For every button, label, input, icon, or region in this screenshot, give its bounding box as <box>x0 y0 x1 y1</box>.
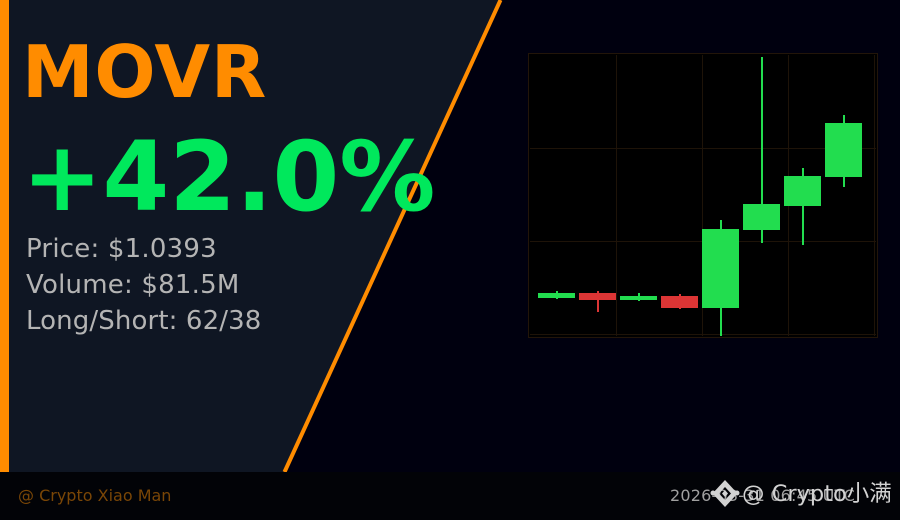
candle 3 <box>620 293 657 301</box>
diagonal orange line <box>284 0 500 472</box>
candle 4 <box>661 294 698 309</box>
text block: market stats <box>26 234 261 336</box>
panel: left diagonal background <box>0 0 500 472</box>
watermark text: @ Crypto小满 <box>742 481 892 507</box>
candle 5 <box>702 220 739 336</box>
icon: watermark logo <box>710 480 740 507</box>
candlestick chart <box>528 54 878 338</box>
candle 1 <box>538 291 575 299</box>
footer credit: @ Crypto Xiao Man <box>18 486 171 505</box>
left accent bar <box>0 0 9 472</box>
candle 2 <box>579 291 616 312</box>
percent change: +42.0% <box>22 121 435 233</box>
text block: market stats: Long/Short: 62/38 <box>26 306 261 336</box>
candle 8 <box>825 115 862 187</box>
text block: market stats: Volume: $81.5M <box>26 270 240 300</box>
candle 6 <box>743 57 780 243</box>
title: ticker: MOVR <box>22 30 267 114</box>
candle 7 <box>784 168 821 245</box>
footer timestamp: 2026-03-31 06:45 UTC <box>670 486 855 505</box>
text block: market stats: Price: $1.0393 <box>26 234 217 264</box>
footer bar <box>0 472 900 520</box>
